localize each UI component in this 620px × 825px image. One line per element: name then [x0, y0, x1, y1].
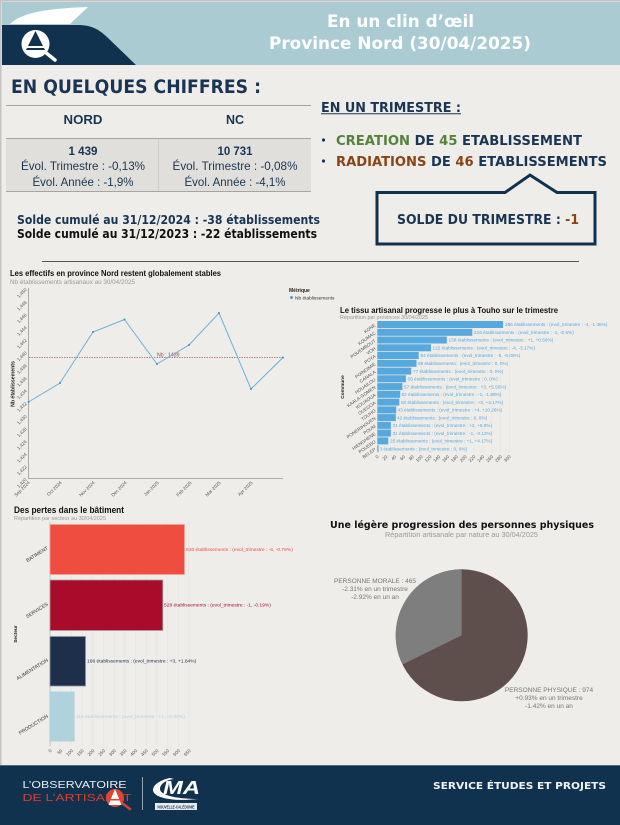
commune labels: KONE [363, 323, 377, 334]
y axis labels: 1,420 [16, 477, 28, 489]
logo: CMA [153, 778, 200, 810]
bar: alimentation: 166 établissements : (evol_trimestre : +3, +1.84%) [87, 659, 197, 665]
navy logo tab [2, 25, 136, 65]
sector labels: PRODUCTION [18, 713, 50, 737]
commune labels: KOUMAC [357, 330, 377, 346]
y axis labels: 1,450 [16, 287, 28, 299]
commune labels: POINDIMIE [354, 362, 377, 379]
text: soldes cumulés: Solde cumulé au 31/12/2023 : -22 établissements [17, 227, 317, 241]
commune labels: BELEP [362, 447, 377, 460]
y axis title: Nb établissements [10, 361, 16, 407]
item: creation: CREATION DE 45 ETABLISSEMENT [336, 134, 582, 149]
grid [386, 320, 509, 453]
x axis labels: 300 [503, 454, 512, 463]
header banner [2, 2, 620, 65]
bar value labels: 158 établissements : (evol_trimestre : +1, +0.56%) [448, 338, 554, 343]
chart subtitle: Répartition par secteur au 30/04/2025 [14, 516, 106, 522]
logo swoosh [10, 7, 88, 24]
label: personne morale [334, 578, 416, 601]
x axis labels: Nov 2024 [78, 480, 96, 498]
y axis labels: 1,446 [16, 312, 28, 324]
data line [28, 312, 284, 403]
y axis labels: 1,440 [16, 350, 28, 362]
commune labels: POUEBO [358, 439, 377, 454]
panel: pie chart nature [330, 519, 594, 710]
heading: en un trimestre: EN UN TRIMESTRE : [321, 101, 461, 116]
x axis labels: 400 [129, 748, 139, 757]
x axis labels: 600 [172, 748, 181, 757]
y axis labels: 1,444 [16, 325, 28, 337]
text: soldes cumulés [17, 213, 320, 241]
x axis labels: 650 [183, 748, 192, 757]
chart title: Le tissu artisanal progresse le plus à Touho sur le trimestre [340, 306, 559, 315]
bar value labels: 3 établissements : (evol_trimestre : 0, 0%) [380, 446, 467, 451]
y axis labels: 1,422 [16, 464, 28, 476]
bar value labels: 89 établissements : (evol_trimestre : 0, 0%) [418, 361, 509, 366]
panel: bar chart communes [340, 306, 608, 463]
item: radiations: RADIATIONS DE 46 ETABLISSEMENTS [336, 155, 607, 170]
grid [61, 522, 189, 746]
pie slice: personne physique [396, 569, 528, 701]
callout: solde du trimestre [377, 175, 595, 244]
pie slice: personne morale [396, 569, 462, 664]
chart title: Les effectifs en province Nord restent globalement stables [10, 269, 222, 278]
y axis labels: 1,434 [16, 388, 28, 400]
bar value labels: 94 établissements : (evol_trimestre : -5, -5.05%) [420, 353, 521, 358]
x axis labels: 60 [399, 454, 406, 461]
sector labels: BATIMENT [25, 546, 50, 564]
x axis labels [374, 454, 512, 463]
title: En un clin d’œil [327, 12, 474, 32]
bar value labels: 43 établissements : (evol_trimestre : +4, +10.26%) [398, 408, 503, 413]
x axis labels: 350 [119, 748, 128, 757]
y axis labels: 1,432 [16, 401, 28, 413]
x axis labels: 100 [65, 748, 74, 757]
commune labels: HIENGHENE [351, 431, 377, 451]
x axis labels: 150 [76, 748, 85, 757]
label: personne morale: -2.31% en un trimestre [342, 586, 408, 593]
bar: services [50, 580, 271, 630]
x axis labels: Feb 2025 [175, 480, 193, 497]
text: service etudes et projets: SERVICE ÉTUDES ET PROJETS [433, 779, 606, 792]
x axis labels: 80 [408, 454, 415, 461]
x axis labels: 280 [494, 454, 503, 463]
x axis labels: 180 [450, 454, 459, 463]
logo: CMA: NOUVELLE-CALÉDONIE [158, 802, 194, 809]
logo: observatoire de l'artisanat: L’OBSERVATOIRE [22, 779, 126, 791]
commune labels: KAALA-GOMEN [346, 385, 377, 408]
x axis labels: 250 [97, 748, 107, 757]
x axis labels: Dec 2024 [110, 480, 128, 498]
x axis labels: Apr 2025 [237, 480, 254, 497]
x axis labels: 500 [151, 748, 160, 757]
bar value labels: 122 établissements : (evol_trimestre : -4, -3.17%) [432, 346, 535, 350]
x axis labels: 40 [390, 454, 398, 461]
commune labels: TOUHO [360, 408, 377, 422]
bar: services: 528 établissements : (evol_trimestre : -1, -0.19%) [164, 602, 271, 608]
column: NORD: 1 439 [68, 144, 98, 158]
bar value labels: 31 établissements : (evol_trimestre : -1, -3.12%) [392, 431, 493, 436]
panel: line chart effectifs [10, 269, 335, 498]
x axis labels [47, 748, 192, 757]
chart title: Des pertes dans le bâtiment [14, 505, 124, 515]
y axis labels: 1,424 [16, 452, 28, 464]
heading: en quelques chiffres: EN QUELQUES CHIFFRES : [11, 76, 261, 98]
x axis labels [13, 480, 254, 498]
x axis labels: 550 [161, 748, 171, 757]
text: soldes cumulés: Solde cumulé au 31/12/2024 : -38 établissements [17, 213, 320, 227]
commune labels: KOUAOUA [355, 392, 377, 410]
bar value labels: 286 établissements : (evol_trimestre : -4, -1.36%) [505, 322, 608, 327]
x axis labels: 260 [485, 454, 494, 463]
commune labels: HOUAILOU [354, 377, 377, 395]
logo: CMA: MA [163, 778, 200, 798]
column: NORD: Évol. Trimestre : -0,13% [21, 158, 145, 173]
callout: solde du trimestre: SOLDE DU TRIMESTRE : -1 [397, 213, 579, 228]
chart subtitle: Répartition par provinces 30/04/2025 [340, 315, 428, 321]
y axis labels: 1,438 [16, 363, 28, 375]
x axis labels: Sep 2024 [13, 480, 31, 498]
y axis labels [16, 287, 28, 489]
sector labels: SERVICES [25, 601, 50, 620]
legend: Métrique [289, 288, 310, 294]
column: NC: Évol. Année : -4,1% [184, 174, 286, 189]
bar value labels: 216 établissements : (evol_trimestre : -1, -0.5%) [474, 330, 574, 335]
bar value labels: 31 établissements : (evol_trimestre : +2, +6.9%) [392, 423, 492, 428]
footer [0, 765, 620, 825]
label: personne morale: PERSONNE MORALE : 465 [334, 578, 416, 585]
y axis labels: 1,428 [16, 426, 28, 438]
label: personne physique: PERSONNE PHYSIQUE : 974 [505, 687, 593, 694]
bar value labels: 50 établissements : (evol_trimestre : +2, +4.17%) [401, 400, 504, 405]
axis title: Secteur [13, 625, 19, 643]
commune labels: OUEGOA [357, 400, 377, 416]
label: personne morale: -2.92% en un an [351, 594, 399, 601]
x axis labels: Jan 2025 [143, 480, 160, 497]
commune labels: POUM [362, 424, 377, 436]
reference label: Nb : 1439 [157, 352, 180, 358]
commune labels: POUEMBOUT [349, 338, 377, 359]
title [269, 12, 531, 54]
icon: red magnifier [106, 789, 130, 809]
label: personne physique [505, 687, 593, 710]
bar value labels: 42 établissements : (evol_trimestre : 0, 0%) [397, 415, 488, 420]
logo: observatoire de l'artisanat [22, 779, 132, 809]
icon: magnifier logo [22, 30, 55, 60]
x axis labels: 0 [374, 454, 380, 460]
column: NORD: Évol. Année : -1,9% [32, 174, 134, 189]
column: NC: 10 731 [218, 144, 253, 158]
x axis labels: 50 [56, 748, 64, 755]
y axis labels: 1,442 [16, 338, 28, 350]
x axis labels: 0 [47, 748, 53, 754]
bar value labels: 25 établissements : (evol_trimestre : +1, +4.17%) [390, 439, 493, 444]
bars [377, 321, 503, 452]
bar: alimentation [50, 636, 197, 686]
x axis labels: 220 [468, 454, 477, 463]
axis title: Commune [340, 375, 346, 399]
label: personne physique: -1.42% en un an [525, 703, 573, 710]
column: NC [172, 112, 298, 189]
commune labels: VOH [366, 346, 377, 356]
y axis labels: 1,430 [16, 414, 28, 426]
x axis labels: 100 [415, 454, 424, 463]
bar value labels: 57 établissements : (evol_trimestre : +3, +5.56%) [404, 384, 507, 389]
x axis labels: 200 [87, 748, 96, 757]
bar: batiment [50, 524, 293, 574]
bar: batiment: 630 établissements : (evol_trimestre : -5, -0.79%) [186, 547, 293, 553]
chart subtitle: Nb établissements artisanaux au 30/04/2025 [10, 280, 136, 286]
x axis labels: 160 [441, 454, 450, 463]
sector labels: ALIMENTATION [16, 657, 50, 682]
commune labels: PONERIHOUEN [346, 416, 377, 440]
column: NORD [21, 112, 145, 189]
column: NORD: NORD [64, 112, 102, 127]
x axis labels: 140 [432, 454, 442, 463]
x axis labels: 20 [381, 454, 389, 461]
x axis labels: Mar 2025 [204, 480, 222, 497]
bar: production [50, 692, 185, 742]
x axis labels: Oct 2024 [46, 480, 63, 497]
bar value labels: 77 établissements : (evol_trimestre : 0, 0%) [413, 369, 504, 374]
y axis labels: 1,426 [16, 439, 28, 451]
legend: Nb établissements [295, 295, 335, 301]
table: key figures [6, 106, 311, 192]
label: personne physique: +0.93% en un trimestre [515, 695, 583, 702]
bar value labels: 65 établissements : (evol_trimestre : 0, 0%) [408, 376, 498, 382]
bar value labels: 52 établissements : (evol_trimestre : -1, -1.89%) [402, 392, 502, 397]
title: Province Nord (30/04/2025) [269, 34, 531, 54]
column: NC: NC [226, 112, 245, 127]
axes [28, 288, 283, 478]
y axis labels: 1,436 [16, 376, 28, 388]
bar value labels [380, 322, 608, 451]
panel: bar chart secteurs [13, 505, 293, 757]
column: NC: Évol. Trimestre : -0,08% [172, 158, 298, 173]
y axis labels: 1,448 [16, 300, 28, 312]
x axis labels: 240 [476, 454, 486, 463]
logo: observatoire de l'artisanat: DE L’ARTISANAT [22, 792, 132, 804]
x axis labels: 300 [108, 748, 117, 757]
bar: production: 115 établissements : (evol_trimestre : +1, +0.88%) [76, 714, 185, 720]
list: créations et radiations [322, 134, 607, 170]
commune labels: CANALA [359, 369, 377, 384]
legend [289, 288, 335, 301]
commune labels [346, 323, 377, 460]
reference line [29, 356, 283, 358]
sector labels [16, 546, 50, 737]
x axis labels: 450 [140, 748, 149, 757]
chart subtitle: Répartition artisanale par nature au 30/04/2025 [385, 532, 538, 539]
x axis labels: 200 [459, 454, 468, 463]
chart title: Une légère progression des personnes physiques [330, 519, 594, 531]
x axis labels: 120 [424, 454, 433, 463]
commune labels: POYA [364, 353, 377, 365]
